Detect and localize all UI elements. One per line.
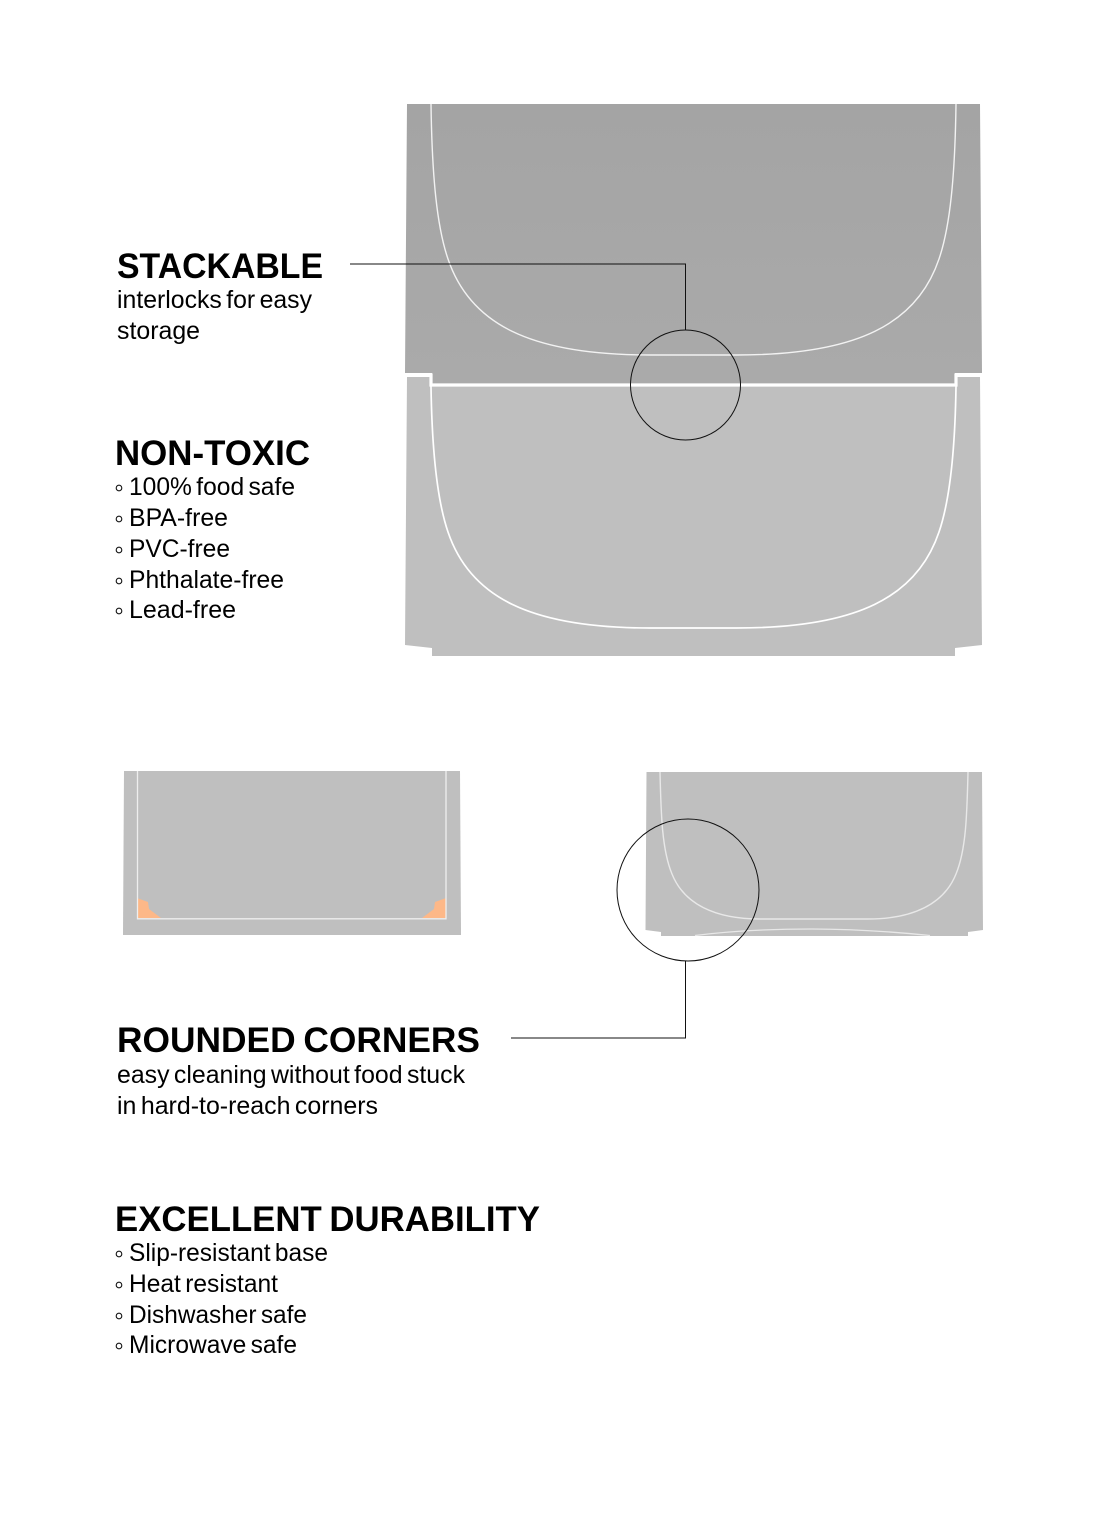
heading and list: excellent durability: EXCELLENT DURABILITY: [115, 1200, 540, 1239]
callout circle: rounded corner: [617, 819, 759, 961]
heading and text: stackable: [117, 247, 323, 345]
diagram: stacked bowls: [405, 104, 982, 656]
leader line: stackable: [350, 264, 686, 330]
heading and list: non-toxic: NON-TOXIC: [115, 434, 310, 473]
heading and list: non-toxic: BPA-free: [129, 504, 228, 532]
heading and list: non-toxic: Lead-free: [129, 596, 236, 624]
heading and list: excellent durability: Dishwasher safe: [129, 1301, 307, 1329]
heading and list: excellent durability: Microwave safe: [129, 1331, 297, 1359]
orange trapped food corner right: [422, 898, 446, 918]
callout circle: stacking interlock: [630, 330, 740, 440]
heading and list: excellent durability: Heat resistant: [129, 1270, 278, 1298]
heading and list: non-toxic: PVC-free: [129, 535, 230, 563]
heading and text: stackable: STACKABLE: [117, 247, 323, 286]
heading and list: non-toxic: Phthalate-free: [129, 566, 284, 594]
heading and text: rounded corners: in hard-to-reach corners: [117, 1092, 378, 1120]
leader line: rounded corners: [511, 961, 686, 1038]
top bowl: [405, 104, 982, 384]
heading and text: stackable: interlocks for easy: [117, 286, 312, 314]
diagram: square-cornered bowl: [123, 771, 461, 935]
heading and text: rounded corners: [117, 1021, 480, 1120]
heading and list: excellent durability: Slip-resistant base: [129, 1239, 328, 1267]
heading and list: non-toxic: [115, 434, 310, 624]
bottom bowl: [405, 377, 982, 656]
heading and text: stackable: storage: [117, 317, 200, 345]
heading and text: rounded corners: easy cleaning without food stuck: [117, 1061, 465, 1089]
diagram: rounded-corner bowl: [646, 772, 983, 936]
heading and list: non-toxic: 100% food safe: [129, 473, 295, 501]
heading and text: rounded corners: ROUNDED CORNERS: [117, 1021, 480, 1060]
orange trapped food corner left: [137, 898, 161, 918]
gap between stacked bowls: [405, 375, 982, 385]
heading and list: excellent durability: [115, 1200, 540, 1359]
